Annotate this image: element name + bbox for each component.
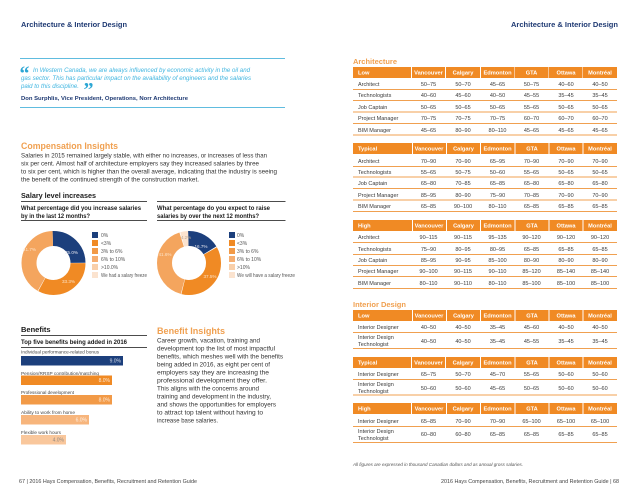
bar chart: benefits: Flexible work hours: [21, 430, 62, 436]
donut chart: last 12 months: 25.0%: [65, 250, 78, 255]
question: last 12 months: What percentage did you increase salaries: [21, 206, 142, 212]
legend: next 12 months: >10%: [237, 265, 250, 271]
table: architecture typical: 70–90: [592, 159, 608, 165]
table: architecture high: 90–120: [522, 235, 541, 241]
table: architecture high: Job Captain: [358, 258, 387, 264]
legend: last 12 months: >10.0%: [101, 265, 119, 271]
table: architecture low: 40–60: [558, 82, 574, 88]
table: architecture high: 65–85: [524, 247, 539, 253]
bar chart: benefits: 4.0%: [53, 438, 65, 444]
bar chart: benefits: Individual performance-related bonus: [21, 350, 100, 356]
table: interior design low: 45–55: [524, 339, 539, 345]
table: interior design typical: 55–65: [524, 372, 539, 378]
table: architecture high: 75–90: [421, 247, 436, 253]
table: architecture low: 70–75: [455, 116, 471, 122]
legend: last 12 months: <3%: [101, 241, 112, 247]
table: interior design high: 65–85: [558, 432, 574, 438]
table: interior design high: 70–90: [490, 419, 505, 425]
table: architecture low: Calgary: [453, 70, 474, 76]
compensation insights text: [21, 141, 277, 184]
table: interior design typical: Vancouver: [414, 360, 444, 366]
table: interior design low: 35–45: [592, 339, 608, 345]
table: architecture high: 90–120: [591, 235, 609, 241]
table: interior design typical: Ottawa: [557, 360, 576, 366]
table: architecture high: 85–100: [522, 281, 541, 287]
table: architecture high: 90–115: [454, 269, 472, 275]
table: architecture high: 95–135: [488, 235, 507, 241]
table: interior design typical: [353, 357, 617, 395]
benefit insights text: being added in 2016, as eight per cent of: [157, 362, 270, 368]
table: architecture typical: 70–85: [455, 181, 471, 187]
legend: next 12 months: We will have a salary freeze: [237, 273, 295, 279]
table: interior design high: Vancouver: [415, 406, 444, 412]
table: interior design low: 40–50: [421, 325, 436, 331]
table: architecture high: 85–120: [522, 269, 541, 275]
table: architecture typical: 70–90: [558, 159, 574, 165]
table: interior design typical: 50–60: [592, 386, 608, 392]
table: architecture typical: 65–85: [592, 204, 608, 210]
table: architecture typical: 70–90: [421, 159, 436, 165]
table: architecture low: 50–65: [490, 105, 505, 111]
table: architecture low: 70–75: [490, 116, 505, 122]
question: next 12 months: [157, 202, 286, 220]
donut chart: next 12 months: 41.6%: [158, 252, 172, 257]
table: architecture typical: 65–80: [421, 181, 436, 187]
table: interior design high: 60–80: [455, 432, 471, 438]
table: architecture typical: Architect: [358, 159, 380, 165]
donut chart: next 12 months: [158, 235, 217, 288]
table: architecture high: Technologists: [358, 247, 392, 253]
table: interior design low: Technologist: [358, 342, 389, 348]
table: architecture typical: Calgary: [453, 146, 475, 152]
table: interior design high: High: [358, 406, 371, 412]
table: architecture typical: 75–90: [490, 193, 505, 199]
table: architecture high: Calgary: [453, 224, 475, 230]
question: last 12 months: [21, 202, 147, 220]
table: architecture low: 45–55: [524, 93, 539, 99]
table: interior design low: 45–60: [524, 325, 539, 331]
donut chart: next 12 months: 37.5%: [203, 274, 217, 279]
table: architecture high: 90–115: [420, 235, 437, 241]
table: architecture high: Edmonton: [483, 224, 512, 230]
table: interior design high: 65–85: [490, 432, 505, 438]
table: interior design high: 70–90: [455, 419, 471, 425]
benefits heading: Top five benefits being added in 2016: [21, 340, 128, 346]
table: architecture high: 85–100: [557, 281, 575, 287]
table: architecture typical: Edmonton: [483, 146, 512, 152]
table: architecture high: 90–120: [557, 235, 575, 241]
table: interior design low: 40–50: [421, 339, 436, 345]
table: architecture low: Technologists: [358, 93, 392, 99]
table: interior design low: Montréal: [588, 314, 612, 320]
table: architecture typical: [353, 143, 617, 212]
table: architecture low: 45–65: [524, 128, 539, 134]
table: interior design typical: 45–65: [490, 386, 505, 392]
table: architecture high: 80–110: [420, 281, 437, 287]
table: architecture typical: GTA: [526, 146, 538, 152]
table: architecture high: 80–95: [455, 247, 471, 253]
table: interior design low: Edmonton: [483, 314, 512, 320]
table: interior design high: 65–85: [592, 432, 608, 438]
table: architecture low: 60–70: [524, 116, 539, 122]
table: interior design high: Interior Design: [358, 429, 394, 435]
table: architecture typical: 65–95: [490, 159, 505, 165]
question: next 12 months: salaries by over the next 12 months?: [157, 214, 259, 220]
table: architecture typical: Technologists: [358, 170, 392, 176]
table: architecture typical: BIM Manager: [358, 204, 391, 210]
table: architecture typical: 65–85: [490, 181, 505, 187]
table: interior design high: 60–80: [421, 432, 436, 438]
benefit insights text: Career growth, vacation, training and: [157, 338, 260, 344]
table: interior design typical: 50–60: [592, 372, 608, 378]
table: interior design high: Technologist: [358, 436, 389, 442]
table: architecture high: Vancouver: [415, 224, 444, 230]
left page header: Architecture & Interior Design: [21, 22, 127, 29]
table: architecture low: 35–45: [592, 93, 608, 99]
table: architecture low: 50–65: [421, 105, 436, 111]
benefits heading: Benefits: [21, 325, 51, 334]
pull quote: Don Surphlis, Vice President, Operations, Norr Architecture: [21, 96, 189, 102]
table: architecture low: 80–90: [455, 128, 471, 134]
table: interior design high: Montréal: [588, 406, 612, 412]
table: architecture low: 50–65: [455, 105, 471, 111]
benefit insights text: development top the list of most impactful: [157, 346, 275, 352]
table: architecture typical: Typical: [358, 146, 378, 152]
table: architecture high: 90–100: [419, 269, 438, 275]
bar chart: benefits: 8.0%: [99, 378, 111, 384]
bar chart: benefits: 8.0%: [99, 398, 111, 404]
table: interior design typical: 50–60: [421, 386, 436, 392]
bar chart: benefits: Pension/RRSP contribution/matching: [21, 371, 99, 377]
pull quote: In Western Canada, we are always influenced by economic activity in the oil and: [33, 67, 250, 74]
benefit insights text: [157, 326, 283, 424]
table: architecture typical: 85–95: [421, 193, 436, 199]
table: interior design typical: 50–60: [455, 386, 471, 392]
table: interior design typical: 50–60: [558, 372, 574, 378]
table: architecture high: Montréal: [588, 224, 612, 230]
legend: last 12 months: We had a salary freeze: [101, 273, 147, 279]
table: interior design typical: Technologist: [358, 389, 389, 395]
table: architecture high: 85–100: [591, 281, 609, 287]
benefits heading: [21, 325, 147, 348]
table: interior design high: 65–100: [522, 419, 541, 425]
donut chart: last 12 months: 41.7%: [23, 247, 36, 252]
pull quote: [20, 58, 285, 108]
table: architecture low: 45–60: [455, 93, 471, 99]
table: architecture high: 80–110: [489, 281, 506, 287]
benefit insights text: professional development they offer.: [157, 378, 267, 384]
footnote: All figures are expressed in thousand Canadian dollars and as annual gross salaries.: [352, 462, 523, 468]
table: architecture low: 60–70: [592, 116, 608, 122]
table: architecture typical: 50–65: [558, 170, 574, 176]
table: interior design high: GTA: [526, 406, 538, 412]
table: architecture low: 50–75: [524, 82, 539, 88]
benefit insights text: This aligns with the concerns around: [157, 386, 259, 392]
right page header: Architecture & Interior Design: [511, 22, 618, 29]
legend: last 12 months: 3% to 6%: [101, 249, 123, 255]
table: architecture low: 70–75: [421, 116, 436, 122]
legend: last 12 months: [92, 232, 147, 279]
benefit insights text: employers say they are increasing the: [157, 370, 269, 376]
table: architecture typical: 80–90: [455, 193, 471, 199]
legend: next 12 months: [229, 232, 295, 279]
table: architecture high: 85–140: [557, 269, 575, 275]
table: architecture high: Architect: [358, 235, 380, 241]
table: interior design high: 65–85: [524, 432, 539, 438]
table: architecture high: Project Manager: [358, 269, 399, 275]
question: next 12 months: What percentage do you expect to raise: [157, 206, 271, 212]
table: interior design low: Interior Designer: [358, 325, 399, 331]
table: interior design high: 65–100: [557, 419, 575, 425]
table: interior design low: Vancouver: [415, 314, 444, 320]
table: architecture high: 80–90: [558, 258, 574, 264]
table: architecture typical: Job Captain: [358, 181, 387, 187]
donut chart: last 12 months: 33.3%: [62, 279, 75, 284]
table: architecture typical: 65–80: [592, 181, 608, 187]
table: architecture typical: 65–80: [558, 181, 574, 187]
table: interior design low: 40–50: [455, 325, 471, 331]
table: interior design typical: Montréal: [588, 360, 612, 366]
compensation insights text: to six per cent, which is higher than the overall average, indicating that the industry is seeing: [21, 168, 277, 176]
table: interior design low: Low: [358, 314, 370, 320]
table: architecture high: 85–140: [591, 269, 609, 275]
bar chart: benefits: 6.0%: [76, 418, 88, 424]
table: interior design low: Calgary: [453, 314, 475, 320]
table: architecture typical: 70–85: [524, 193, 539, 199]
table: architecture low: Architect: [358, 82, 380, 88]
table: interior design low: GTA: [526, 314, 538, 320]
bar chart: benefits: Ability to work from home: [21, 410, 75, 416]
table: architecture typical: 90–100: [454, 204, 472, 210]
compensation insights text: Compensation Insights: [21, 141, 118, 151]
benefit insights text: increase base salaries.: [157, 418, 218, 424]
table: architecture low: 80–110: [489, 128, 506, 134]
table: architecture high: 90–95: [455, 258, 471, 264]
table: architecture low: 45–65: [558, 128, 574, 134]
table: architecture high: BIM Manager: [358, 281, 391, 287]
legend: next 12 months: <3%: [237, 241, 248, 247]
table: architecture low: [353, 67, 617, 135]
table: architecture low: 45–65: [592, 128, 608, 134]
table: architecture typical: 70–90: [524, 159, 539, 165]
table: architecture typical: 80–110: [489, 204, 506, 210]
legend: next 12 months: 0%: [237, 233, 245, 239]
table: interior design typical: 50–65: [524, 386, 539, 392]
table: architecture low: 35–45: [558, 93, 574, 99]
table: interior design typical: Interior Design: [358, 382, 394, 388]
table: interior design low: 40–50: [455, 339, 471, 345]
pull quote: gas sector. This has particular impact on the availability of engineers and the salaries: [21, 75, 252, 82]
table: architecture high: 90–115: [454, 235, 472, 241]
table: architecture typical: 50–60: [490, 170, 505, 176]
compensation insights text: six per cent. Almost half of architecture employers say they increased salaries by three: [21, 160, 259, 168]
benefit insights text: Benefit Insights: [157, 326, 225, 336]
table: interior design typical: Interior Designer: [358, 372, 399, 378]
table: interior design high: 65–100: [591, 419, 609, 425]
table: architecture typical: 65–85: [558, 204, 574, 210]
table: architecture typical: 70–90: [592, 193, 608, 199]
donut chart: last 12 months: [23, 238, 78, 288]
legend: last 12 months: 0%: [101, 233, 109, 239]
pull quote: paid to this discipline.: [20, 83, 79, 90]
icon: opening quote mark: “: [20, 63, 30, 85]
table: interior design low: [353, 310, 617, 348]
legend: next 12 months: 3% to 6%: [237, 249, 259, 255]
benefit insights text: to attract top talent without having to: [157, 410, 263, 416]
table: architecture typical: 50–75: [455, 170, 471, 176]
bar chart: benefits: [21, 350, 123, 444]
benefit insights text: and shows the opportunities for employers: [157, 402, 276, 408]
table: architecture low: 55–65: [524, 105, 539, 111]
table: architecture high: 90–110: [454, 281, 472, 287]
table: interior design low: Interior Design: [358, 335, 394, 341]
table: interior design high: 65–85: [421, 419, 436, 425]
table: architecture low: GTA: [526, 70, 537, 76]
table: architecture typical: 55–65: [421, 170, 436, 176]
table: interior design typical: 45–70: [490, 372, 505, 378]
table: architecture high: Ottawa: [557, 224, 576, 230]
table: architecture typical: Montréal: [588, 146, 612, 152]
table: architecture low: 45–65: [421, 128, 436, 134]
question: last 12 months: by in the last 12 months?: [21, 214, 90, 220]
donut chart: next 12 months: 16.7%: [194, 244, 208, 249]
benefit insights text: benefits, which meshes well with the benefits: [157, 354, 283, 360]
table: architecture typical: Vancouver: [415, 146, 444, 152]
table: architecture low: 45–65: [490, 82, 505, 88]
table: architecture low: BIM Manager: [358, 128, 391, 134]
table: architecture high: High: [358, 224, 371, 230]
table: architecture low: 60–70: [558, 116, 574, 122]
table: interior design typical: Edmonton: [483, 360, 512, 366]
table: architecture typical: 65–85: [421, 204, 436, 210]
table: architecture low: 40–50: [592, 82, 608, 88]
table: architecture high: 85–100: [488, 258, 507, 264]
table: architecture high: 90–110: [489, 269, 506, 275]
table: architecture low: 50–75: [421, 82, 436, 88]
table: interior design high: [353, 403, 617, 442]
table: interior design typical: 65–75: [421, 372, 436, 378]
table: interior design low: 35–45: [558, 339, 574, 345]
bar chart: benefits: 9.0%: [110, 358, 122, 364]
legend: next 12 months: 6% to 10%: [237, 257, 262, 263]
donut chart: next 12 months: 4.2%: [181, 235, 191, 240]
table: architecture low: 40–50: [490, 93, 505, 99]
table: interior design typical: Calgary: [453, 360, 474, 366]
table: interior design typical: GTA: [526, 360, 538, 366]
table: architecture high: 65–85: [592, 247, 608, 253]
table: architecture high: 80–90: [524, 258, 539, 264]
interior design heading: Interior Design: [353, 300, 406, 309]
table: interior design high: Calgary: [453, 406, 474, 412]
table: architecture low: Ottawa: [557, 70, 576, 76]
architecture heading: Architecture: [353, 57, 397, 66]
table: architecture low: 50–65: [592, 105, 608, 111]
table: interior design high: Interior Designer: [358, 419, 399, 425]
salary level increases heading: Salary level increases: [21, 191, 96, 200]
left footer: 67 | 2016 Hays Compensation, Benefits, Recruitment and Retention Guide: [19, 479, 197, 485]
table: architecture low: Project Manager: [358, 116, 399, 122]
table: architecture typical: 50–65: [592, 170, 608, 176]
table: interior design high: Edmonton: [483, 406, 512, 412]
table: architecture typical: Project Manager: [358, 193, 399, 199]
table: architecture low: 50–65: [558, 105, 574, 111]
table: interior design low: 35–45: [490, 339, 505, 345]
table: interior design typical: Typical: [358, 360, 378, 366]
table: architecture high: 80–95: [490, 247, 505, 253]
table: interior design low: Ottawa: [557, 314, 576, 320]
bar chart: benefits: Professional development: [21, 390, 75, 396]
table: architecture typical: 65–80: [524, 181, 539, 187]
table: interior design low: 40–50: [558, 325, 574, 331]
table: architecture low: Vancouver: [414, 70, 444, 76]
table: architecture typical: 55–65: [524, 170, 539, 176]
table: architecture high: 80–90: [592, 258, 608, 264]
table: architecture low: Low: [358, 70, 370, 76]
compensation insights text: Salaries in 2015 remained largely stable, with either no increases, or increases of less than: [21, 152, 267, 160]
table: architecture typical: 65–85: [524, 204, 539, 210]
legend: last 12 months: 6% to 10%: [101, 257, 126, 263]
table: architecture high: GTA: [526, 224, 538, 230]
table: architecture low: 40–60: [421, 93, 436, 99]
table: architecture typical: Ottawa: [557, 146, 576, 152]
table: architecture high: 85–95: [421, 258, 436, 264]
table: architecture low: Montréal: [588, 70, 612, 76]
table: interior design low: 35–45: [490, 325, 505, 331]
table: architecture low: 50–70: [455, 82, 471, 88]
table: architecture high: 65–85: [558, 247, 574, 253]
table: architecture typical: 70–90: [558, 193, 574, 199]
table: architecture typical: 70–90: [455, 159, 471, 165]
table: interior design high: Ottawa: [557, 406, 576, 412]
table: architecture high: [353, 220, 617, 288]
table: architecture low: Job Captain: [358, 105, 387, 111]
benefit insights text: training and development in the industry,: [157, 394, 271, 400]
icon: closing quote mark: ”: [84, 79, 94, 101]
table: interior design typical: 50–60: [558, 386, 574, 392]
table: interior design typical: 50–70: [455, 372, 471, 378]
table: interior design low: 40–50: [592, 325, 608, 331]
right footer: 2016 Hays Compensation, Benefits, Recruitment and Retention Guide | 68: [441, 479, 619, 485]
compensation insights text: the benefit of the continued strength of the construction market.: [21, 176, 199, 184]
table: architecture low: Edmonton: [483, 70, 512, 76]
